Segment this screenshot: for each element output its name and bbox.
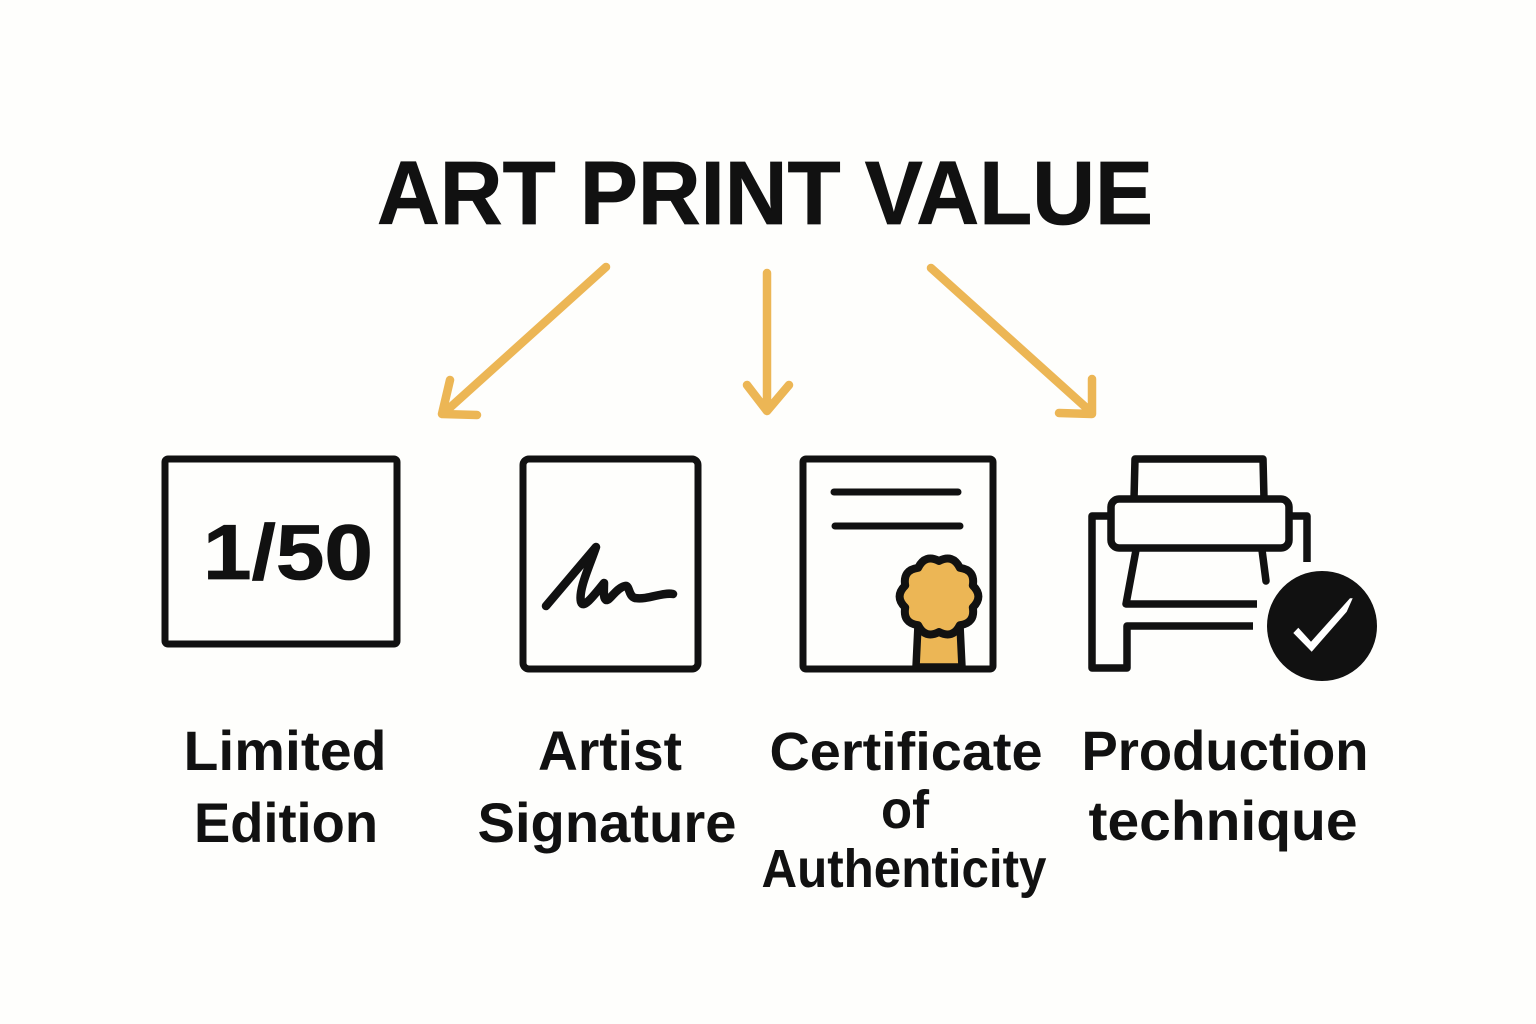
arrow: right [931,268,1092,414]
icon: production printer with check [1092,459,1377,681]
label: production technique: Production [1082,719,1368,782]
label: certificate of authenticity: Certificate [770,722,1042,782]
label: limited edition [184,719,386,854]
label: artist signature [478,719,736,854]
arrow: left [442,267,606,415]
icon: certificate [803,459,993,669]
title: ART PRINT VALUE [377,144,1153,244]
icon: artist signature [523,459,698,669]
label: certificate of authenticity [762,722,1046,899]
label: production technique: technique [1088,789,1358,852]
label: certificate of authenticity: of [881,780,930,840]
label: production technique [1082,719,1368,852]
icon: limited edition frame [165,459,397,644]
label: artist signature: Signature [478,791,736,854]
icon: limited edition frame: 1/50 [203,508,373,596]
label: limited edition: Edition [194,791,378,854]
label: limited edition: Limited [184,719,386,782]
label: artist signature: Artist [538,719,682,782]
label: certificate of authenticity: Authenticity [762,839,1046,899]
arrow: center [747,273,789,411]
